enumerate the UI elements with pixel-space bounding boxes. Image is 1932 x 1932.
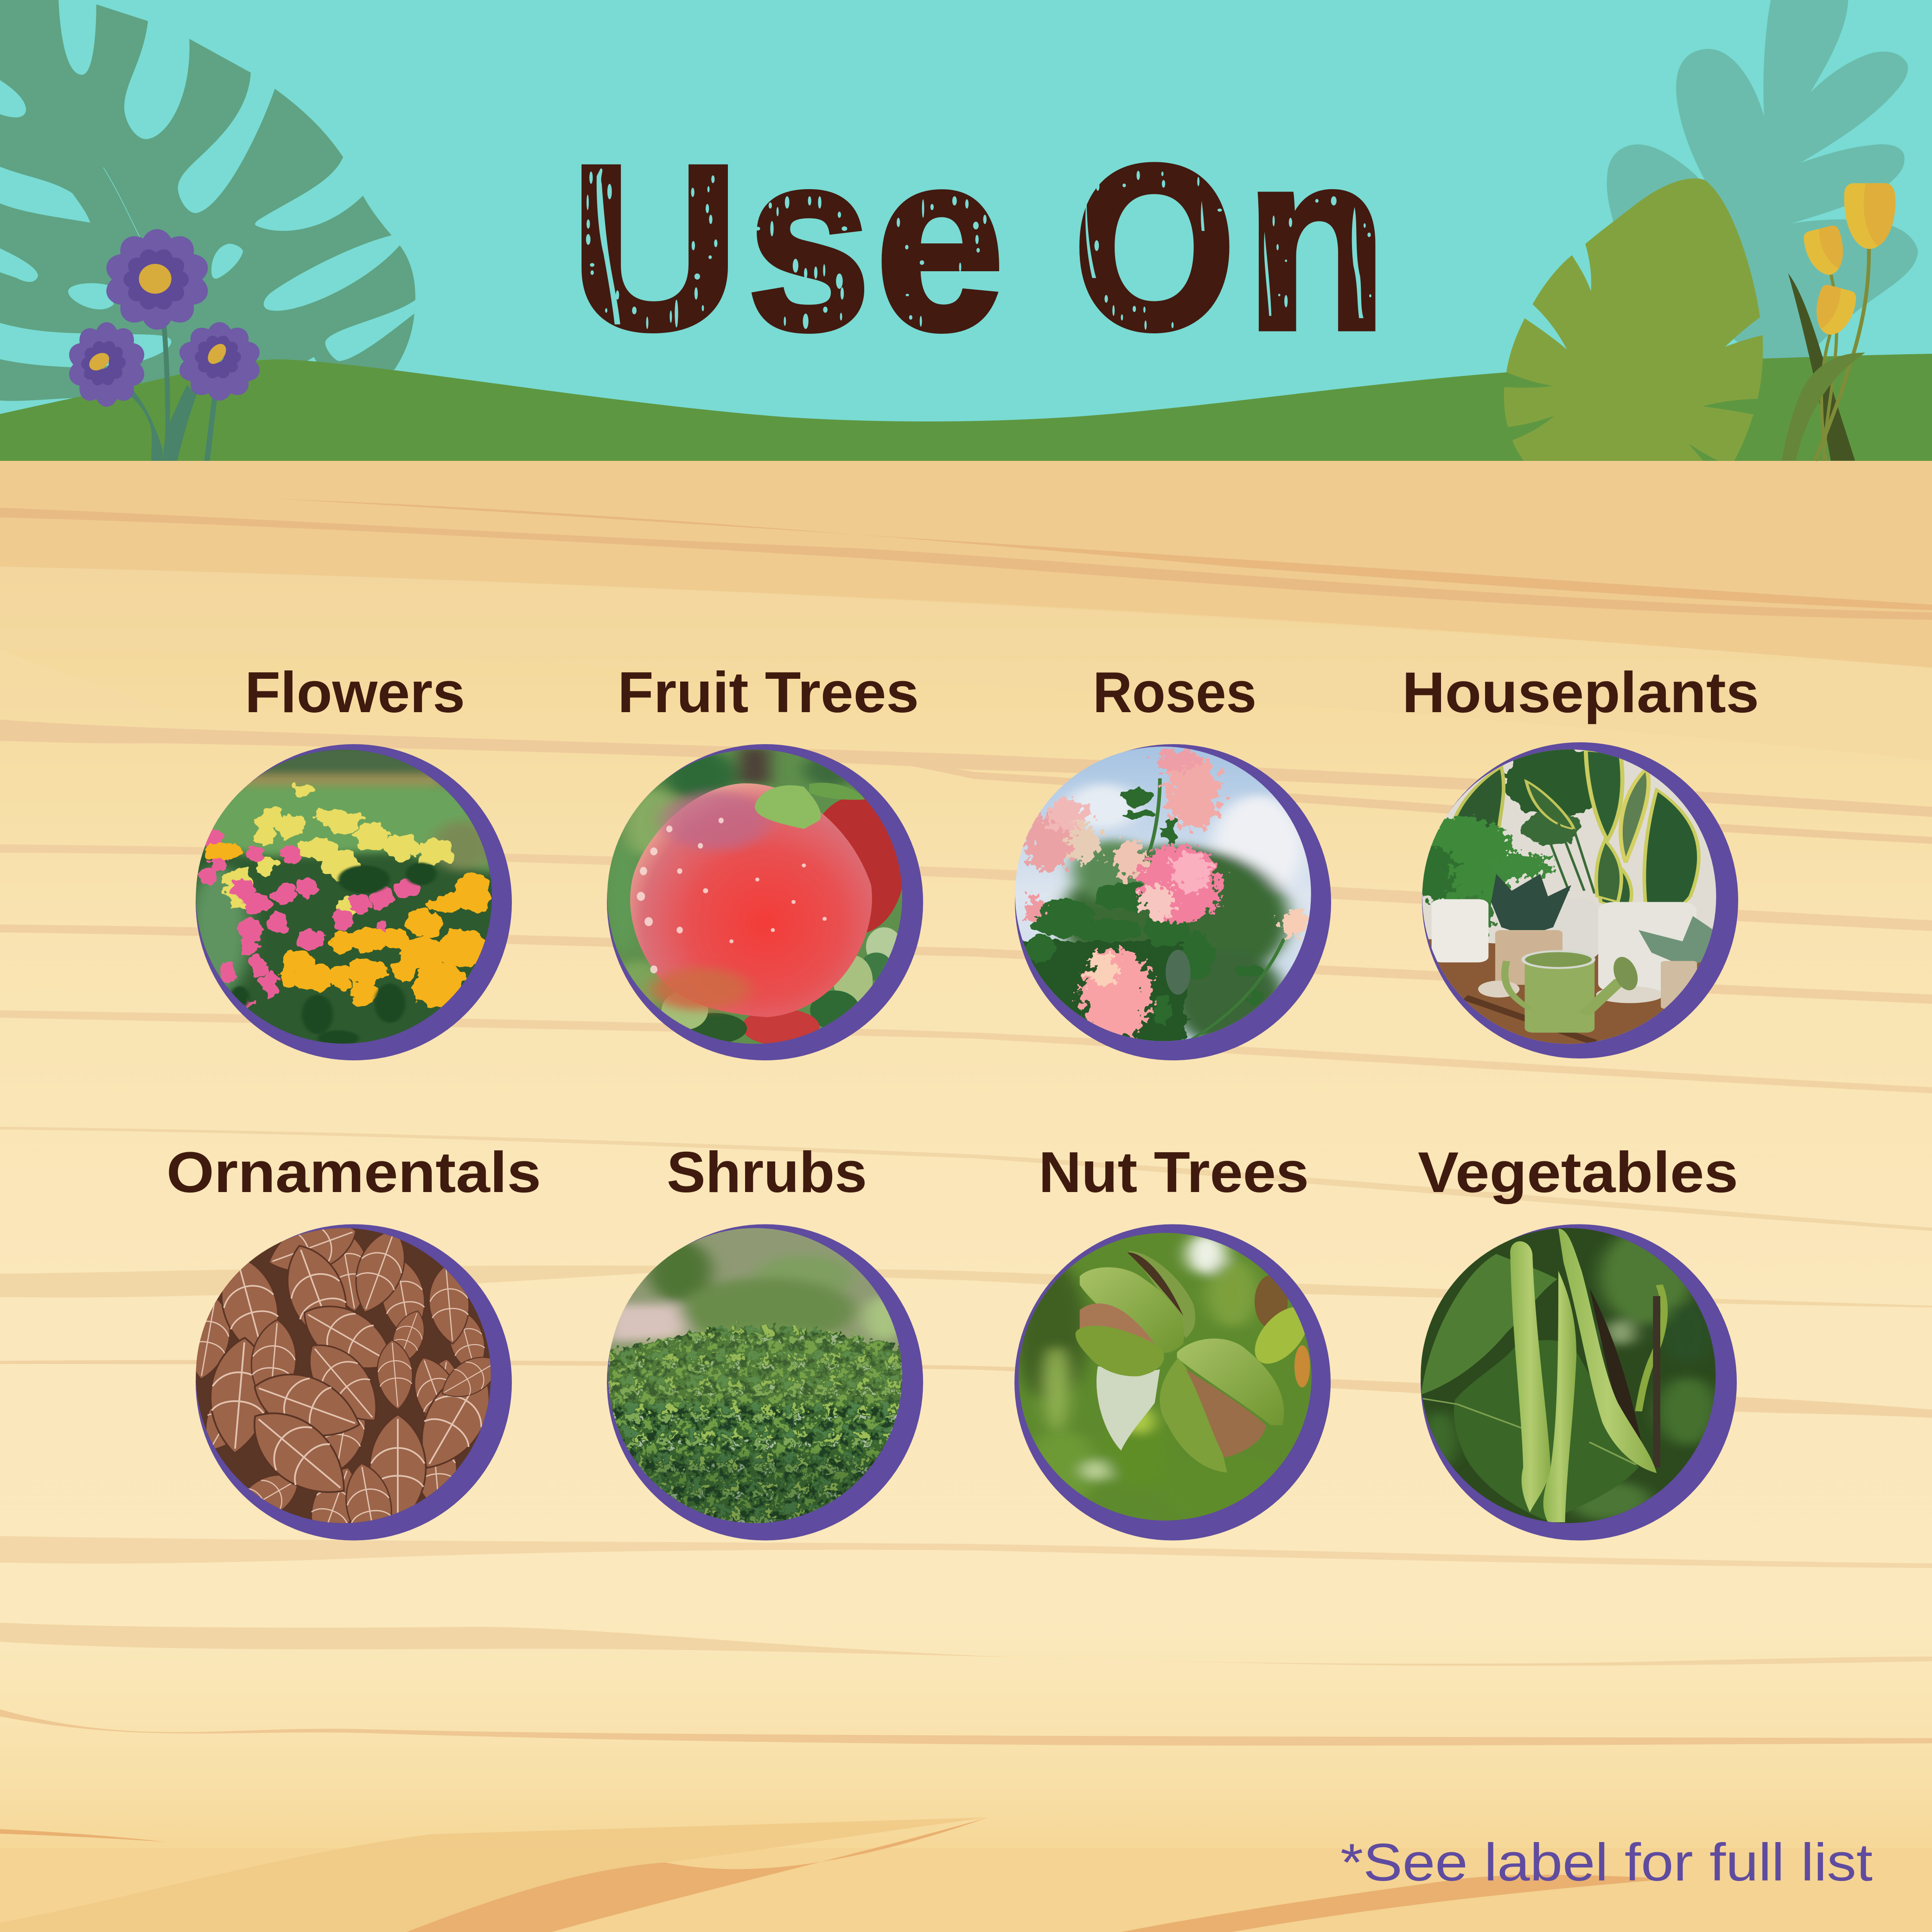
label: Flowers: Flowers bbox=[245, 661, 465, 725]
title: e bbox=[875, 99, 1004, 382]
label: Houseplants: Houseplants bbox=[1402, 661, 1759, 725]
photo: roses bbox=[1010, 745, 1320, 1045]
card: Flowers bbox=[188, 661, 512, 1060]
ring bbox=[1422, 742, 1738, 1058]
photo: flower bed bbox=[188, 745, 504, 1046]
arc blade bbox=[1782, 353, 1865, 461]
footnote: *See label for full list bbox=[1340, 1833, 1873, 1892]
title: n bbox=[1245, 99, 1387, 382]
photo: apple bbox=[602, 747, 912, 1045]
ring bbox=[1015, 744, 1331, 1060]
label: Vegetables: Vegetables bbox=[1418, 1141, 1738, 1205]
ring bbox=[1014, 1224, 1331, 1540]
card: Shrubs bbox=[602, 1141, 923, 1540]
title distress texture bbox=[586, 168, 1371, 330]
ring bbox=[1421, 1224, 1737, 1540]
label: Ornamentals: Ornamentals bbox=[166, 1141, 541, 1205]
title: O bbox=[1073, 116, 1236, 378]
hill bbox=[0, 354, 1932, 461]
sky bbox=[0, 0, 1932, 461]
photo: houseplants bbox=[1414, 746, 1724, 1045]
dark blade bbox=[1788, 273, 1855, 461]
icon: purple flowers bbox=[66, 229, 263, 461]
ring bbox=[607, 744, 923, 1060]
label: Nut Trees: Nut Trees bbox=[1039, 1141, 1309, 1205]
illustration: monstera leaf bbox=[0, 0, 415, 416]
card: Roses bbox=[1010, 661, 1331, 1060]
card: Vegetables bbox=[1418, 1141, 1738, 1540]
hill patch over back leaf bbox=[1753, 354, 1932, 461]
title bbox=[0, 0, 1932, 461]
card: Fruit Trees bbox=[602, 661, 923, 1060]
tulips bbox=[1804, 183, 1895, 335]
photo: green beans bbox=[1419, 1226, 1724, 1526]
card: Nut Trees bbox=[1010, 1141, 1331, 1540]
title: s bbox=[747, 99, 871, 382]
front leaf bbox=[1504, 179, 1763, 461]
photo: pecan nuts bbox=[1010, 1229, 1320, 1526]
ring bbox=[196, 1224, 512, 1540]
photo: ornamental leaves bbox=[180, 1209, 507, 1554]
label: Fruit Trees: Fruit Trees bbox=[618, 661, 919, 725]
card: Ornamentals bbox=[166, 1141, 541, 1554]
ring bbox=[196, 744, 512, 1060]
tulip stems bbox=[1815, 249, 1869, 461]
illustration: leaves and tulips bbox=[1504, 0, 1932, 461]
title: U bbox=[570, 116, 740, 378]
card: Houseplants bbox=[1402, 661, 1759, 1058]
label: Shrubs: Shrubs bbox=[667, 1141, 867, 1205]
label: Roses: Roses bbox=[1093, 661, 1256, 725]
photo: hedge bbox=[602, 1226, 912, 1535]
background: wood floor bbox=[0, 461, 1932, 1932]
back leaf bbox=[1607, 0, 1918, 358]
ring bbox=[607, 1224, 923, 1540]
